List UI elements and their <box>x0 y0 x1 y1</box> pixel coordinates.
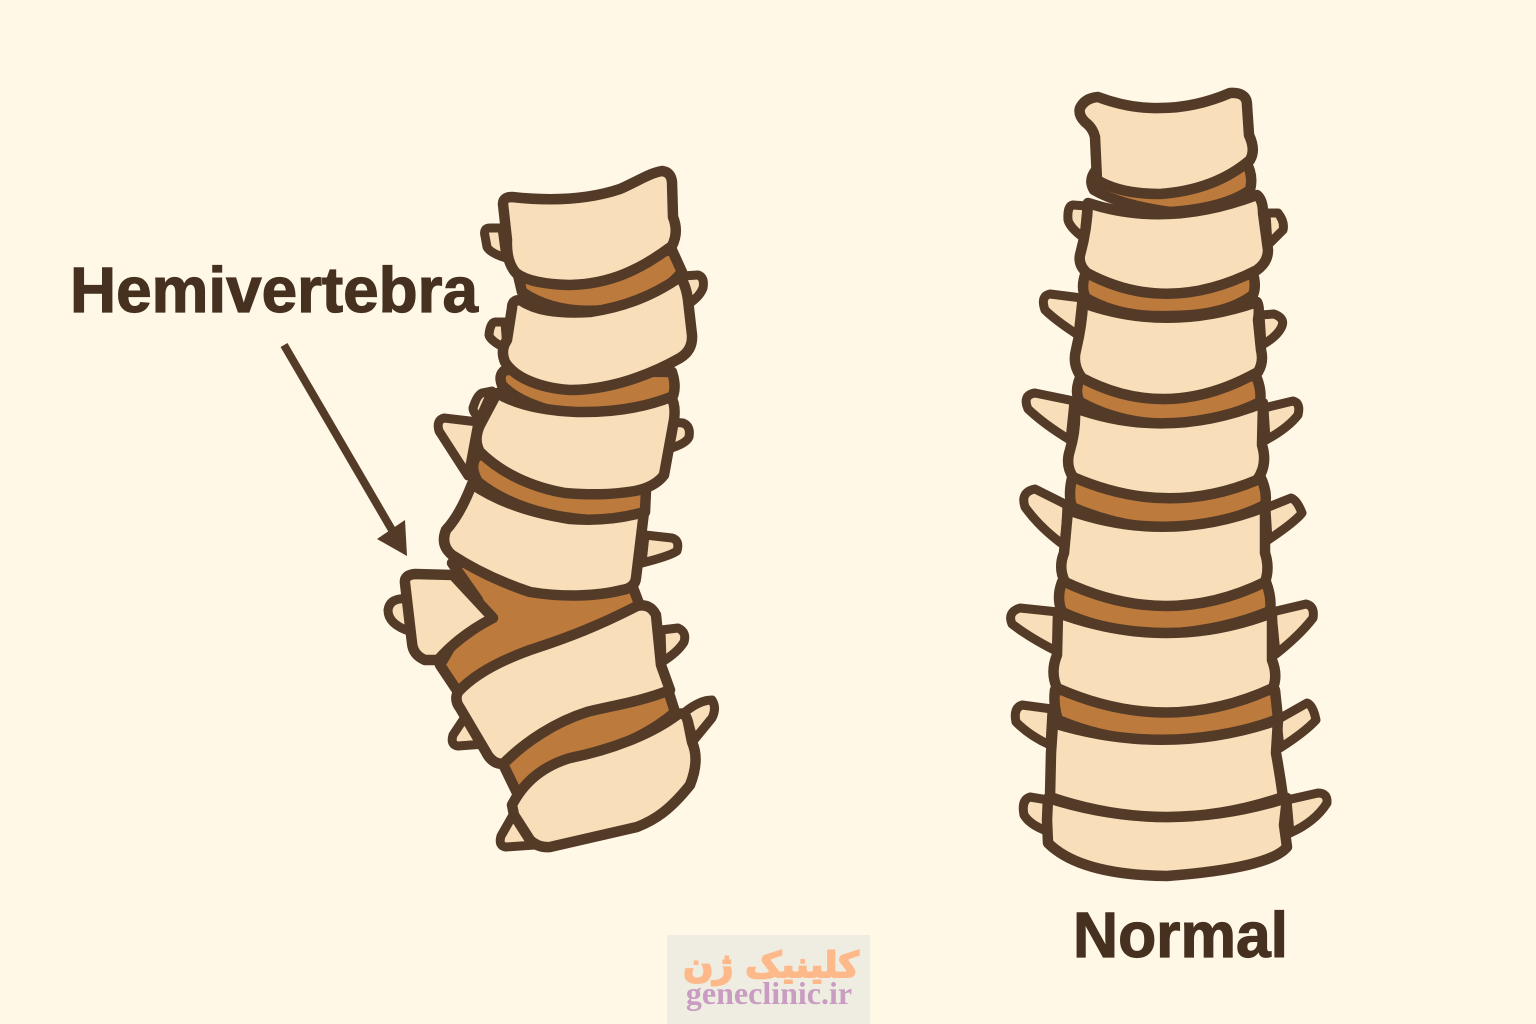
left spine transverse processes <box>388 228 714 847</box>
vertebra 5 <box>1061 507 1268 606</box>
vertebra 2 <box>1080 195 1268 294</box>
normal spine transverse processes <box>1011 205 1327 833</box>
vertebra 8 <box>1047 798 1287 876</box>
vertebra 5 <box>456 605 670 764</box>
vertebra 7 <box>1050 720 1283 817</box>
diagram: normal spine <box>1011 93 1327 876</box>
left spine intervertebral discs <box>440 250 682 795</box>
vertebra 2 <box>503 277 692 390</box>
arrow: points to hemivertebra <box>284 345 407 556</box>
vertebra 3 <box>476 393 675 494</box>
vertebra 4 <box>444 484 644 596</box>
normal spine vertebrae <box>1047 93 1287 876</box>
vertebra 6 <box>1054 613 1275 712</box>
vertebra 1 <box>503 171 676 285</box>
vertebra 1 <box>1080 93 1253 194</box>
label: Hemivertebra: Hemivertebra <box>70 254 478 326</box>
normal spine intervertebral discs <box>1054 160 1278 741</box>
diagram: hemivertebra spine <box>388 171 714 847</box>
label: Normal: Normal <box>1073 899 1288 971</box>
vertebra 4 <box>1068 403 1264 498</box>
watermark <box>667 935 870 1024</box>
vertebra 6 <box>512 714 696 847</box>
left spine vertebrae <box>405 171 696 847</box>
watermark: کلینیک ژن <box>683 946 859 986</box>
vertebra 3 <box>1075 302 1262 399</box>
hemivertebra wedge <box>405 574 493 660</box>
watermark: geneclinic.ir <box>686 975 852 1011</box>
